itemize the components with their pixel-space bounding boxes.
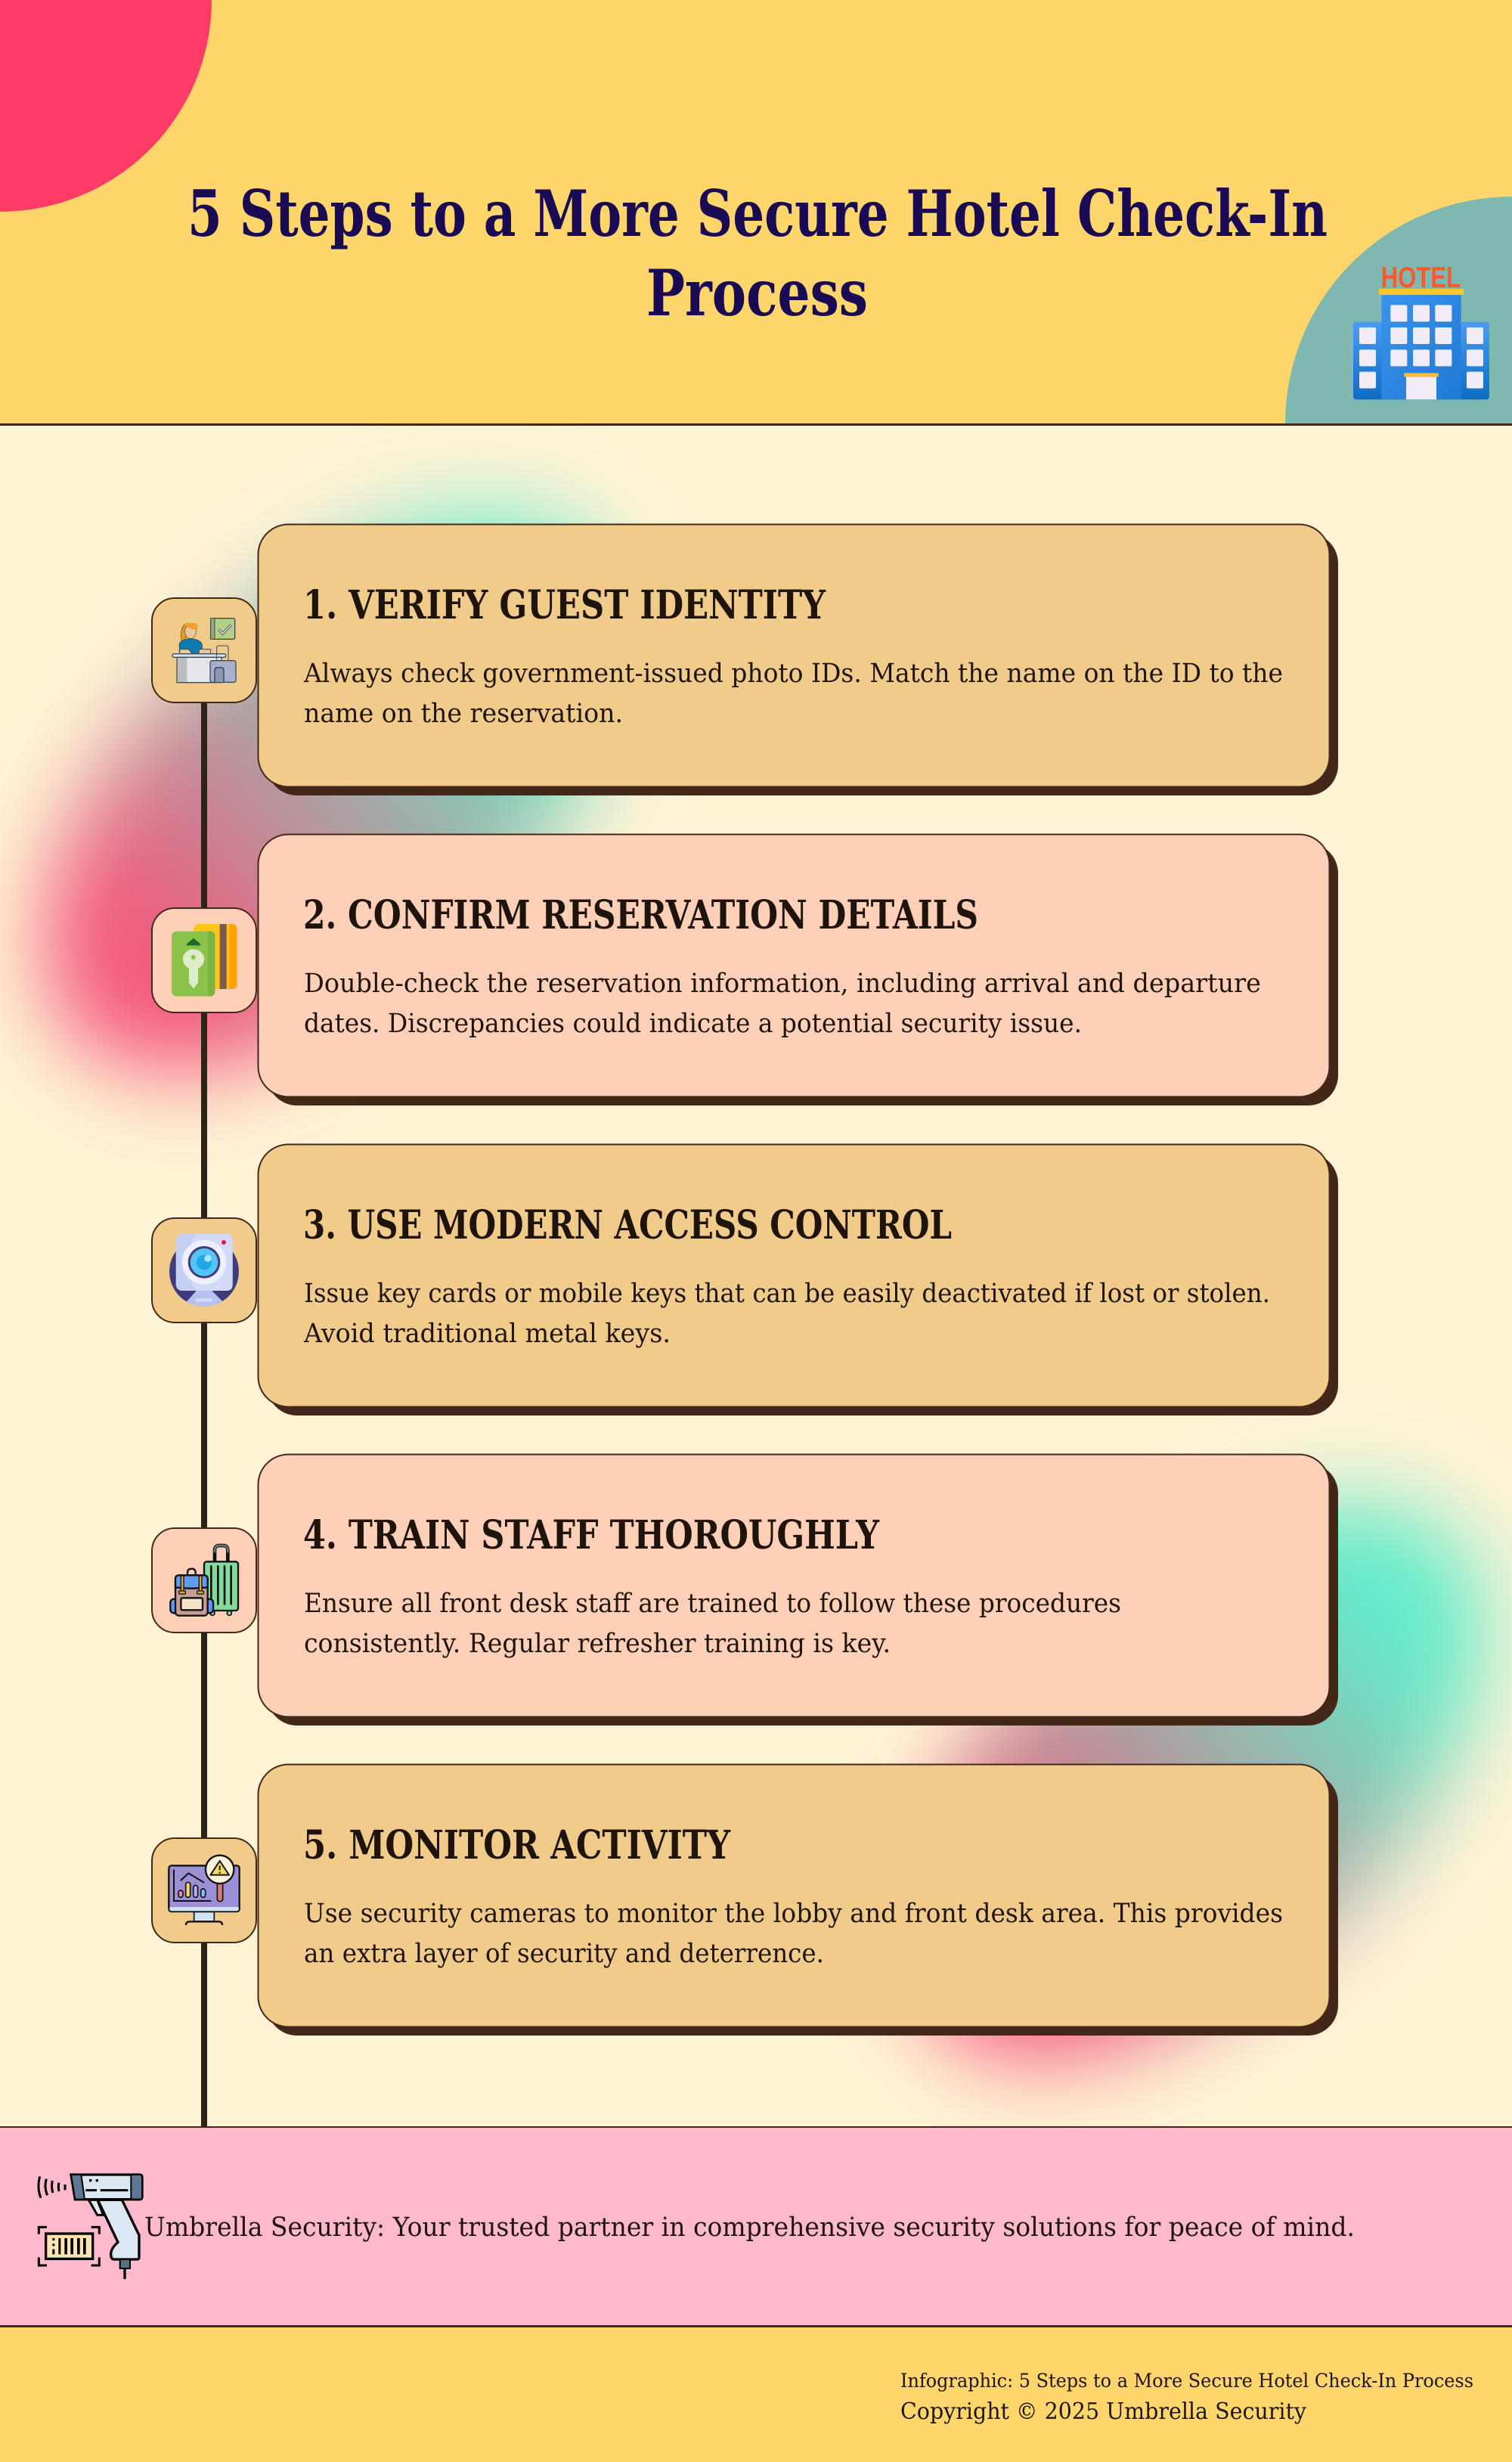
decorative soft blobs xyxy=(0,413,1512,2162)
icon box: monitor alert xyxy=(152,1838,256,1943)
step 2 text xyxy=(304,969,1261,1039)
footer credits: Infographic: 5 Steps to a More Secure Hotel Check-In Process xyxy=(900,2370,1473,2392)
step 4 text: Ensure all front desk staff are trained to follow these procedures xyxy=(304,1589,1121,1619)
footer credits xyxy=(900,2370,1473,2425)
decorative teal circle xyxy=(1285,197,1512,423)
panel: step 2 xyxy=(259,835,1338,1105)
step 4 text: consistently. Regular refresher training is key. xyxy=(304,1629,891,1659)
panel: step 1 xyxy=(259,525,1338,795)
icon: hotel building xyxy=(1353,261,1489,399)
step 4 text xyxy=(304,1589,1121,1659)
step 4 heading: 4. TRAIN STAFF THOROUGHLY xyxy=(303,1512,880,1558)
icon box: receptionist xyxy=(152,598,256,702)
title xyxy=(187,176,1328,330)
step 1 heading: 1. VERIFY GUEST IDENTITY xyxy=(303,582,826,628)
icon: hotel building: HOTEL xyxy=(1381,261,1461,294)
panel: step 3 xyxy=(259,1145,1338,1415)
step 3 text: Avoid traditional metal keys. xyxy=(303,1319,671,1349)
title: Process xyxy=(646,256,868,330)
step 5 text: Use security cameras to monitor the lobby and front desk area. This provides xyxy=(304,1899,1283,1929)
icon box: luggage xyxy=(152,1528,256,1633)
header band xyxy=(0,0,1512,426)
step 2 text: Double-check the reservation information, including arrival and departure xyxy=(304,969,1261,999)
timeline line xyxy=(201,605,207,2126)
step 3 heading: 3. USE MODERN ACCESS CONTROL xyxy=(303,1202,952,1248)
step 3 text xyxy=(303,1279,1270,1349)
step 2 heading: 2. CONFIRM RESERVATION DETAILS xyxy=(303,892,978,938)
icon box: camera xyxy=(152,1218,256,1322)
callout text: Umbrella Security: Your trusted partner in comprehensive security solutions for peace of mind. xyxy=(144,2212,1355,2243)
step 5 text xyxy=(304,1899,1283,1969)
main background xyxy=(0,426,1512,2126)
step 1 text xyxy=(303,659,1283,729)
footer credits: Copyright © 2025 Umbrella Security xyxy=(900,2398,1306,2425)
panel: step 4 xyxy=(259,1455,1338,1726)
decorative red circle xyxy=(0,0,212,212)
icon: barcode scanner xyxy=(39,2175,142,2279)
step 2 text: dates. Discrepancies could indicate a potential security issue. xyxy=(304,1009,1082,1039)
step 5 heading: 5. MONITOR ACTIVITY xyxy=(303,1822,731,1868)
step 5 text: an extra layer of security and deterrence. xyxy=(304,1939,824,1969)
footer band xyxy=(0,2325,1512,2462)
step 3 text: Issue key cards or mobile keys that can be easily deactivated if lost or stolen. xyxy=(304,1279,1270,1309)
icon box: key card xyxy=(152,908,256,1012)
step 1 text: name on the reservation. xyxy=(304,699,623,729)
step 1 text: Always check government-issued photo IDs. Match the name on the ID to the xyxy=(303,659,1283,689)
panel: step 5 xyxy=(259,1765,1338,2036)
footer callout band xyxy=(0,2126,1512,2325)
